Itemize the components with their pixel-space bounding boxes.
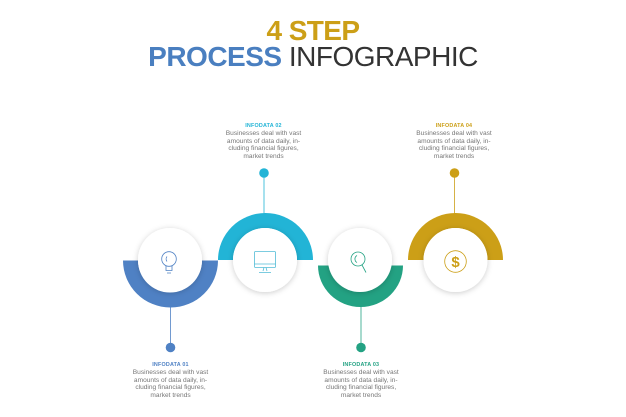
text block: infodata 01: cluding financial figures, xyxy=(135,384,206,391)
title xyxy=(148,15,478,72)
text block: infodata 03: amounts of data daily, in- xyxy=(324,377,398,384)
text block: infodata 04: amounts of data daily, in- xyxy=(417,138,491,145)
text block: infodata 04: cluding financial figures, xyxy=(419,145,489,152)
icon: dollar coin: $ xyxy=(451,254,460,271)
text block: infodata 03: Businesses deal with vast xyxy=(323,369,399,376)
text block: infodata 01: INFODATA 01 xyxy=(152,362,189,368)
text block: infodata 01 xyxy=(133,362,208,399)
title line: 4 step: 4 STEP xyxy=(267,15,359,46)
text block: infodata 03: cluding financial figures, xyxy=(326,384,396,391)
step 2 graphic xyxy=(218,168,313,292)
text block: infodata 03: INFODATA 03 xyxy=(343,362,379,368)
text block: infodata 02: Businesses deal with vast xyxy=(226,130,301,137)
text block: infodata 02: cluding financial figures, xyxy=(228,145,299,152)
text block: infodata 01: market trends xyxy=(150,392,191,399)
text block: infodata 01: Businesses deal with vast xyxy=(133,369,208,376)
text block: infodata 03 xyxy=(323,362,399,399)
step 3 graphic xyxy=(318,228,403,352)
text block: infodata 02: INFODATA 02 xyxy=(245,123,282,129)
text block: infodata 04: market trends xyxy=(434,153,474,160)
text block: infodata 02 xyxy=(226,123,302,160)
text block: infodata 04 xyxy=(416,123,492,160)
step 4 graphic xyxy=(408,168,503,292)
text block: infodata 01: amounts of data daily, in- xyxy=(134,377,207,384)
text block: infodata 02: amounts of data daily, in- xyxy=(227,138,300,145)
text block: infodata 04: INFODATA 04 xyxy=(436,123,472,129)
step 1 graphic xyxy=(123,228,218,352)
text block: infodata 04: Businesses deal with vast xyxy=(416,130,492,137)
icon: computer monitor xyxy=(254,252,276,272)
text block: infodata 02: market trends xyxy=(243,153,284,160)
icon: magnifying glass xyxy=(351,252,366,272)
title line: process infographic: PROCESS INFOGRAPHIC xyxy=(148,41,478,72)
icon: light bulb xyxy=(162,252,176,273)
text block: infodata 03: market trends xyxy=(341,392,381,399)
